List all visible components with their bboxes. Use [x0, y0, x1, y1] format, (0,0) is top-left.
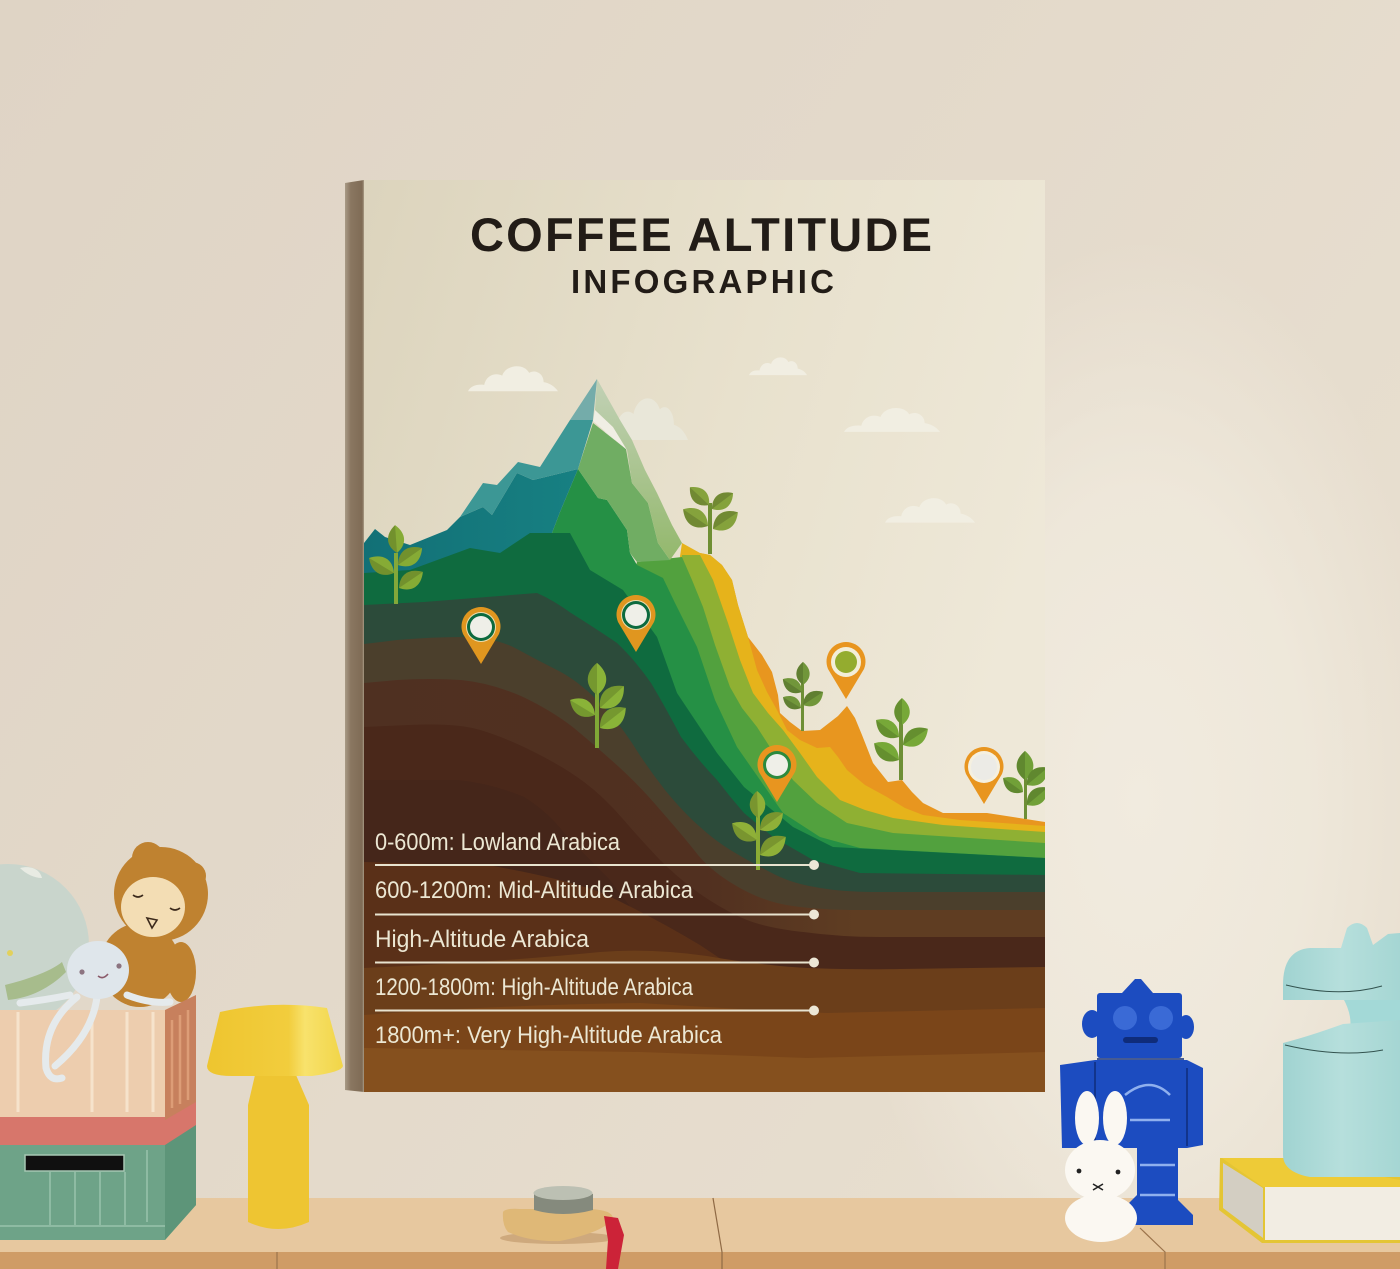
dark teal face [364, 469, 578, 580]
legend row 3: High-Altitude Arabica [375, 926, 590, 953]
soil band 3 [398, 724, 1045, 970]
photo prop: globe [0, 864, 89, 1026]
sage ridge [595, 379, 682, 560]
light green face [578, 423, 670, 562]
soil band 5 [364, 1003, 1045, 1058]
legend row 4: 1200-1800m: High-Altitude Arabica [375, 974, 694, 1001]
soil band 6 [364, 1048, 1045, 1092]
altitude legend [375, 829, 819, 1049]
soil wedge [364, 862, 719, 968]
map pin 2 [616, 595, 656, 652]
photo prop: teddy bear [100, 842, 208, 1007]
plant: left [369, 525, 423, 604]
photo prop: blue robot [1060, 979, 1203, 1225]
subtitle: INFOGRAPHIC [571, 263, 834, 300]
plant: centre [570, 663, 626, 748]
orange slope [700, 553, 1045, 826]
mid teal face [460, 420, 593, 517]
photo prop: book [1219, 1158, 1400, 1243]
dark green layer [364, 533, 1045, 875]
poster side edge [345, 180, 364, 1092]
poster [345, 180, 1053, 1092]
map pin 5 [964, 747, 1004, 804]
pale teal summit [570, 379, 597, 420]
soil band 2 [364, 679, 1045, 937]
legend row 1: 0-600m: Lowland Arabica [375, 829, 621, 856]
mid green slope [636, 557, 1045, 858]
green face [552, 469, 1043, 858]
poster artwork [364, 180, 1053, 1092]
legend row 5: 1800m+: Very High-Altitude Arabica [375, 1022, 723, 1049]
map pin 1 [462, 607, 500, 664]
map pin 4 [758, 745, 796, 802]
photo prop: mint dinosaur [1283, 923, 1400, 1177]
soil band 4 [364, 950, 1045, 1015]
photo prop: white bunny [1065, 1091, 1137, 1242]
clouds [468, 357, 975, 523]
lamp base [248, 1075, 309, 1229]
wooden table [0, 1198, 1400, 1269]
photo prop: knitted octopus [20, 941, 170, 1079]
title [472, 218, 930, 294]
legend row 2: 600-1200m: Mid-Altitude Arabica [375, 877, 694, 904]
green crate [0, 1120, 196, 1240]
photo prop: stacked crates [0, 995, 196, 1240]
very dark green layer [364, 593, 1045, 892]
salmon crate band [0, 1100, 196, 1145]
legend lines with dots [375, 860, 819, 1016]
lime slope [682, 555, 1045, 843]
plant: far right [1003, 751, 1045, 819]
soil core [364, 780, 700, 1000]
plant: slope small [782, 662, 824, 731]
snow patch [593, 410, 627, 450]
plant: upper ridge [683, 487, 738, 554]
soil band 1 [364, 637, 1045, 910]
map pin 3 [826, 642, 866, 699]
red ribbon [604, 1216, 624, 1269]
photo prop: yellow lamp [207, 1005, 343, 1229]
lamp shade [207, 1005, 343, 1076]
yellow slope [680, 543, 1045, 832]
photo prop: wooden toy [500, 1186, 624, 1269]
plant: lower slope [732, 791, 786, 870]
title: COFFEE ALTITUDE [470, 208, 932, 261]
plant: slope large [874, 698, 928, 780]
peach crate [0, 1010, 165, 1117]
mountain and soil layers [364, 379, 1045, 1092]
